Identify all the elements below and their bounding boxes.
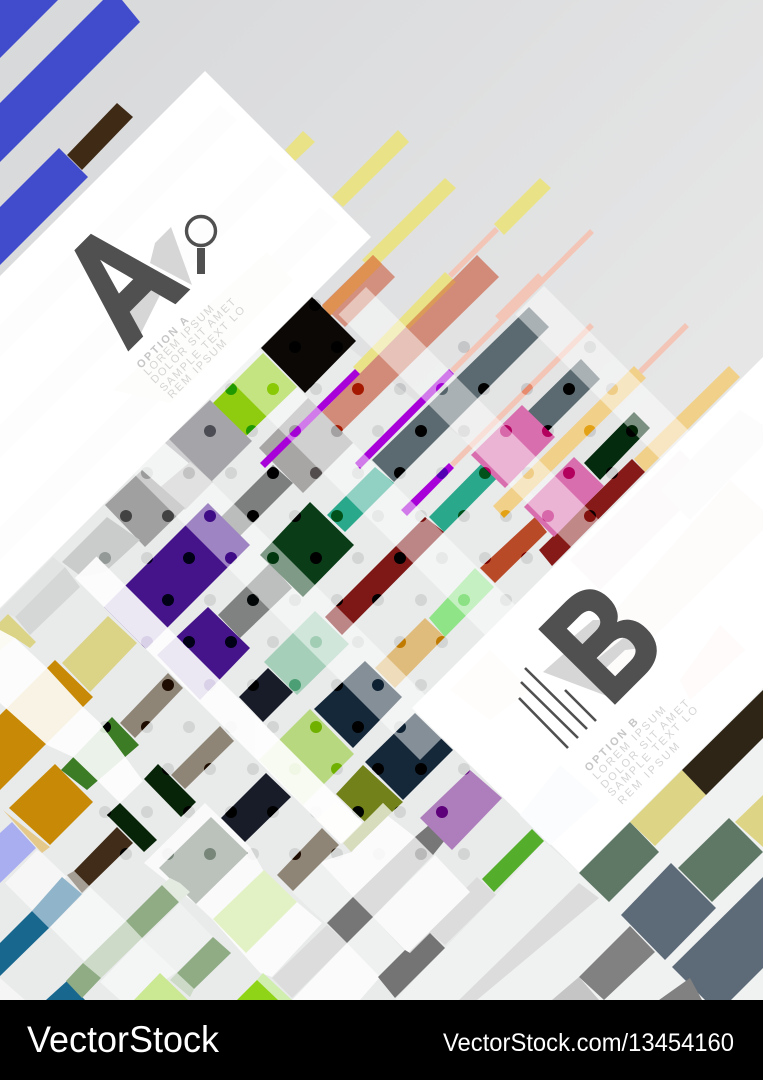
- pale green square: [213, 870, 297, 953]
- footer bar: [0, 1000, 763, 1080]
- brown bar: [67, 103, 133, 170]
- option B text: REM IPSUM: [616, 741, 682, 807]
- footer logo: VectorStock: [27, 1019, 219, 1060]
- pale olive block: [343, 803, 392, 852]
- purple thin bars: [260, 369, 454, 516]
- slate blocks right: [621, 863, 763, 1000]
- purple block lower: [420, 770, 502, 850]
- option B text: [583, 698, 701, 807]
- icon: magnifier: [186, 216, 216, 274]
- dot grid: [99, 299, 638, 860]
- green bar lower: [482, 829, 544, 892]
- grey-green square: [159, 817, 248, 904]
- green small block: [61, 717, 139, 790]
- gold square: [9, 764, 93, 845]
- strong white bands: [0, 556, 362, 844]
- yellow bars: [285, 130, 551, 376]
- blue bars: [0, 0, 140, 265]
- navy block small: [239, 668, 293, 722]
- option A text: SAMPLE TEXT LO: [158, 304, 248, 394]
- light green block: [259, 709, 354, 805]
- footer url: VectorStock.com/13454160: [443, 1029, 734, 1057]
- olive block: [336, 765, 403, 822]
- option B text: OPTION B: [583, 716, 641, 774]
- mint block: [264, 611, 349, 695]
- dark brown bar: [74, 827, 133, 886]
- periwinkle block: [0, 822, 36, 883]
- option B text: DOLOR SIT AMET: [599, 698, 692, 791]
- khaki bars: [0, 614, 137, 692]
- letter A: A: [29, 187, 213, 374]
- amber strip: [3, 810, 50, 853]
- ghost letter A: [128, 227, 192, 335]
- taupe bars: [120, 673, 339, 891]
- mid-grey bars lower: [272, 825, 599, 1000]
- option B text: SAMPLE TEXT LO: [606, 704, 701, 799]
- dark bar right: [682, 690, 763, 795]
- amber bars: [493, 366, 740, 518]
- slate bars: [372, 307, 600, 482]
- option B text: LOREM IPSUM: [591, 704, 668, 782]
- green corner shapes: [134, 973, 292, 1000]
- ghost letter B: [543, 620, 642, 698]
- dark red bars: [325, 459, 645, 635]
- navy block lower: [221, 773, 291, 842]
- black square: [261, 297, 356, 393]
- option A text: OPTION A: [135, 315, 191, 371]
- dark green square: [260, 502, 354, 597]
- grey blocks: [15, 398, 353, 638]
- sage bars: [66, 878, 231, 998]
- grey bars right: [552, 926, 702, 1000]
- option A text: DOLOR SIT AMET: [149, 296, 239, 386]
- pink blocks: [471, 405, 604, 537]
- icon: text lines: [519, 668, 596, 748]
- panel: option B: [412, 357, 763, 872]
- dark green bar: [584, 412, 650, 480]
- green block: [213, 353, 297, 437]
- translucent band overlays: [134, 286, 689, 760]
- letter B: B: [511, 550, 693, 731]
- sage squares right: [579, 818, 763, 902]
- steel blue bars: [0, 871, 89, 1000]
- purple blocks: [104, 503, 250, 700]
- option A text: REM IPSUM: [166, 337, 229, 401]
- gold bar: [0, 660, 93, 790]
- bright green bar: [429, 568, 494, 637]
- sand bar: [375, 618, 445, 688]
- option A text: [135, 296, 248, 401]
- khaki bars right: [630, 770, 763, 847]
- salmon thin lines: [450, 229, 687, 465]
- lower base area: [0, 308, 763, 1000]
- salmon bars: [322, 255, 499, 435]
- teal bars: [327, 440, 520, 532]
- navy blocks: [314, 661, 453, 800]
- pale cream block: [316, 803, 362, 843]
- option A text: LOREM IPSUM: [142, 303, 217, 378]
- panel: option A: [0, 71, 371, 608]
- orange-red bar: [480, 517, 547, 583]
- dark green small bars: [107, 764, 196, 852]
